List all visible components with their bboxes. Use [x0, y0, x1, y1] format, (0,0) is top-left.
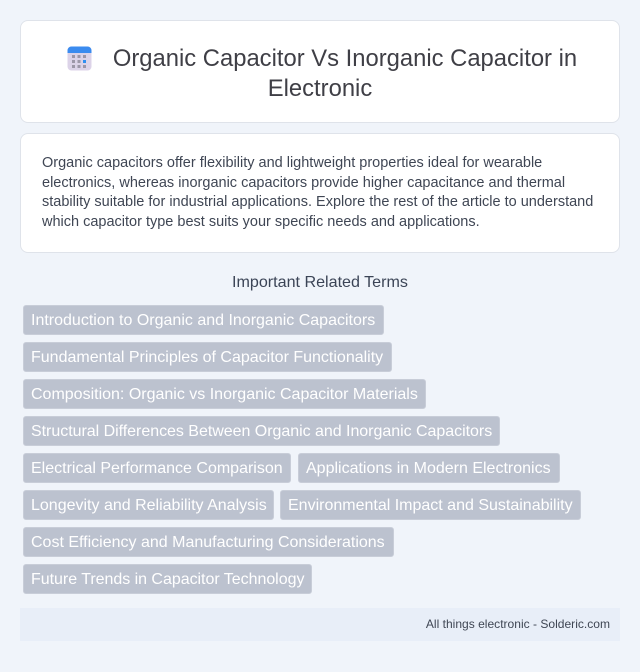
tag — [23, 527, 394, 557]
footer text: All things electronic - Solderic.com — [426, 617, 610, 631]
intro paragraph: electronics, whereas inorganic capacitors provide higher capacitance and thermal — [42, 174, 565, 190]
tag — [23, 453, 291, 483]
tag: Electrical Performance Comparison — [31, 460, 283, 477]
intro paragraph: Organic capacitors offer flexibility and lightweight properties ideal for wearable — [42, 155, 542, 171]
icon: calendar — [68, 46, 92, 70]
tag — [280, 490, 581, 520]
tag: Composition: Organic vs Inorganic Capacitor Materials — [31, 386, 418, 403]
tag — [23, 342, 392, 372]
tag: Longevity and Reliability Analysis — [31, 497, 267, 514]
intro paragraph: which capacitor type best suits your specific needs and applications. — [42, 214, 480, 230]
intro paragraph — [42, 155, 593, 230]
tag — [23, 379, 426, 409]
title — [113, 45, 577, 102]
section heading: Important Related Terms — [232, 273, 408, 291]
footer bar — [20, 608, 620, 641]
tag: Environmental Impact and Sustainability — [288, 497, 573, 514]
tag: Structural Differences Between Organic and Inorganic Capacitors — [31, 423, 492, 440]
tag: Future Trends in Capacitor Technology — [31, 571, 304, 588]
tag: Fundamental Principles of Capacitor Functionality — [31, 349, 383, 366]
tag — [23, 416, 500, 446]
tag: Applications in Modern Electronics — [306, 460, 551, 477]
tag: Cost Efficiency and Manufacturing Considerations — [31, 534, 385, 551]
title: Organic Capacitor Vs Inorganic Capacitor in — [113, 45, 577, 72]
tag — [23, 564, 312, 594]
header panel — [20, 20, 620, 123]
tag — [23, 305, 384, 335]
intro text panel — [20, 133, 620, 253]
tag: Introduction to Organic and Inorganic Capacitors — [31, 312, 375, 329]
tag — [298, 453, 560, 483]
tag list — [23, 305, 581, 594]
intro paragraph: stability suitable for industrial applications. Explore the rest of the article to understand — [42, 194, 593, 210]
title: Electronic — [268, 75, 372, 102]
tag — [23, 490, 274, 520]
